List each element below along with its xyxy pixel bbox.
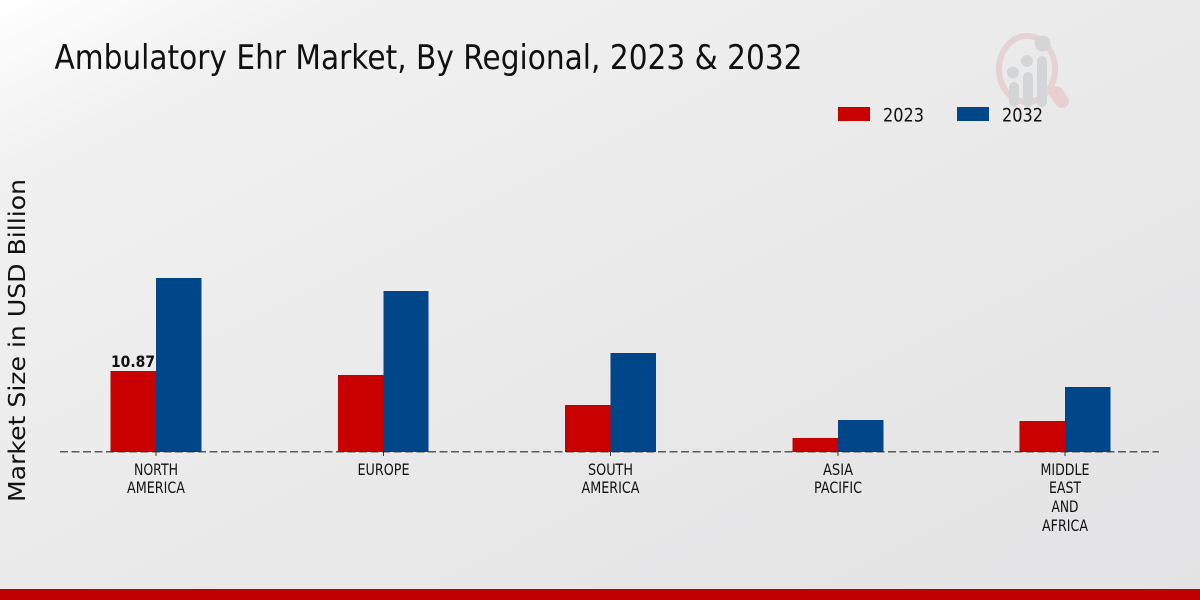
label: North America: AMERICA <box>127 478 185 497</box>
label: North America: NORTH <box>134 460 178 479</box>
x axis labels <box>127 460 1090 535</box>
label: Middle East and Africa: AND <box>1052 497 1078 516</box>
bars: Europe <box>338 291 428 452</box>
title: Ambulatory Ehr Market, By Regional, 2023 & 2032 <box>54 38 802 78</box>
value label: 10.87 <box>111 352 155 371</box>
label: South America: AMERICA <box>582 478 640 497</box>
y axis label: Market Size in USD Billion <box>5 179 31 502</box>
legend item: 2023: 2023 <box>883 104 924 126</box>
label: Asia Pacific <box>814 460 862 497</box>
bars: South America <box>565 353 656 452</box>
bars: Middle East and Africa <box>1020 387 1110 452</box>
label: Middle East and Africa <box>1040 460 1090 535</box>
footer bar <box>0 589 1200 600</box>
legend <box>838 104 1043 126</box>
label: Middle East and Africa: AFRICA <box>1042 516 1088 535</box>
label: South America: SOUTH <box>588 460 633 479</box>
icon: watermark logo <box>999 36 1062 102</box>
label: Europe: EUROPE <box>358 460 410 479</box>
axis baseline <box>60 451 1159 453</box>
bar chart <box>60 278 1159 456</box>
label: South America <box>582 460 640 497</box>
bars: North America <box>110 278 202 452</box>
label: Middle East and Africa: MIDDLE <box>1040 460 1090 479</box>
label: North America <box>127 460 185 497</box>
label: Asia Pacific: PACIFIC <box>814 478 862 497</box>
label: Asia Pacific: ASIA <box>823 460 853 479</box>
bars: Asia Pacific <box>792 420 884 452</box>
legend item: 2032 <box>957 104 1043 126</box>
axis ticks <box>156 452 1065 456</box>
legend item: 2032: 2032 <box>1002 104 1043 126</box>
legend item: 2023 <box>838 104 924 126</box>
label: Middle East and Africa: EAST <box>1049 478 1081 497</box>
